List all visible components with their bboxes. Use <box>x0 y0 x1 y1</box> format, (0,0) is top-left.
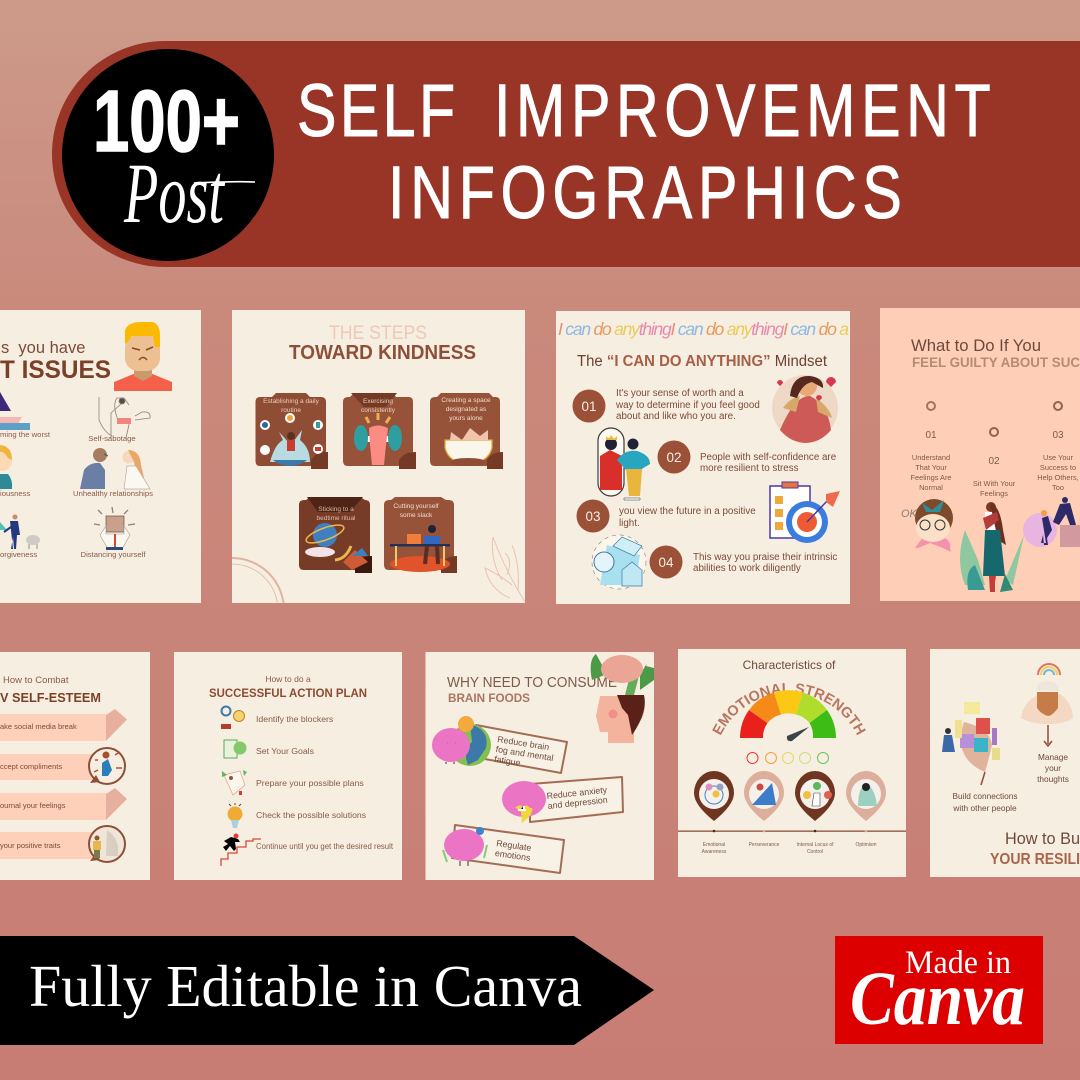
step 01: about and like who you are. <box>616 411 736 422</box>
title: INFOGRAPHICS <box>388 152 908 235</box>
card: regulate emotions <box>443 825 564 873</box>
pin: optimism <box>846 771 886 821</box>
icon: person with box on head <box>94 507 135 550</box>
step 03: light. <box>619 518 640 529</box>
icon: person at mirror <box>598 428 650 500</box>
text: build connections: Build connections <box>952 791 1018 801</box>
badge: 100+ Post <box>62 49 274 261</box>
decorative leaf <box>485 537 525 602</box>
row: positive traits: your positive traits <box>0 841 61 850</box>
title: SELF <box>297 70 458 153</box>
text: build connections: with other people <box>952 803 1017 813</box>
step 01 <box>910 402 952 492</box>
text: manage your thoughts: thoughts <box>1037 774 1069 784</box>
icon: frowning man <box>114 322 172 391</box>
label: ming the worst <box>0 430 51 439</box>
step 03: Help Others, <box>1037 473 1079 482</box>
badge: 100+ Post: Post <box>123 145 225 241</box>
step 03: Use Your <box>1043 453 1074 462</box>
heading: V SELF-ESTEEM <box>0 690 101 705</box>
step 01: Understand <box>912 453 950 462</box>
badge: made in Canva <box>835 936 1043 1044</box>
icon: woman among plants <box>960 502 1024 592</box>
icon: woman with hearts <box>772 375 838 443</box>
step 04: 04 <box>658 555 674 570</box>
icon: meditating man <box>1021 681 1073 746</box>
heading: The “I CAN DO ANYTHING” Mindset <box>577 353 828 370</box>
icon: girl with glasses <box>901 499 953 552</box>
heading <box>911 339 1080 367</box>
heading: THE STEPS <box>329 323 427 344</box>
item: possible solutions: Check the possible solutions <box>256 810 367 820</box>
step 03: Success to <box>1040 463 1076 472</box>
pin: emotional awareness <box>694 771 734 821</box>
timeline labels: Optimism <box>855 842 877 848</box>
step 01 <box>572 388 760 422</box>
heading: How to do a <box>265 674 311 684</box>
heading: How to Combat <box>3 675 69 686</box>
text: manage your thoughts: Manage <box>1038 752 1068 762</box>
panel: I can do anything mindset <box>556 311 850 604</box>
badge: 100+ Post: 100+ <box>93 73 240 170</box>
icon: helping hand <box>1023 497 1080 547</box>
card: regulate emotions: Regulate <box>496 838 532 853</box>
step 02: 02 <box>988 456 1000 467</box>
card: bedtime ritual: Sticking to a <box>318 506 354 513</box>
card: creating a space: designated as <box>446 406 487 413</box>
step 02: more resilient to stress <box>700 463 799 474</box>
panel: trust issues <box>0 310 201 603</box>
timeline <box>678 830 906 832</box>
banner: fully editable in Canva: Fully Editable in Canva <box>29 953 582 1019</box>
timeline labels: Internal Locus of <box>797 842 834 848</box>
item: continue stairs: Continue until you get the desired result <box>256 842 394 851</box>
row: journal your feelings: ournal your feelings <box>0 801 66 810</box>
card: reduce brain fog <box>432 716 567 773</box>
step 04: This way you praise their intrinsic <box>693 552 837 563</box>
heading <box>289 326 476 359</box>
card: cutting yourself some slack <box>384 497 457 573</box>
panel: toward kindness <box>232 310 525 603</box>
decorative hand-written strip: I can do anythingI can do anythingI can do a <box>558 319 849 339</box>
text: manage your thoughts: your <box>1045 763 1061 773</box>
item: identify the blockers: Identify the blockers <box>256 714 334 724</box>
icon: couple arguing <box>80 448 150 489</box>
heading: TOWARD KINDNESS <box>289 342 476 364</box>
title <box>297 70 996 235</box>
heading: How to Bu <box>1005 830 1080 848</box>
step 02: Feelings <box>980 489 1008 498</box>
icon: rainbow <box>1038 664 1060 675</box>
step 04: abilities to work diligently <box>693 563 801 574</box>
step 03: 03 <box>1052 430 1064 441</box>
label: orgiveness <box>0 550 37 559</box>
step 01: It's your sense of worth and a <box>616 388 744 399</box>
timeline labels: Control <box>807 849 823 855</box>
card: reduce brain fog: fog and mental <box>495 744 554 763</box>
icon: boat <box>0 392 30 430</box>
card: reduce brain fog: fatigue <box>494 754 521 768</box>
step 03: you view the future in a positive <box>619 506 756 517</box>
step 03 <box>576 500 756 532</box>
card: reduce anxiety: and depression <box>547 795 608 811</box>
icon: puzzle team <box>942 702 1000 785</box>
label: Unhealthy relationships <box>73 489 153 498</box>
pin: locus of control <box>795 771 835 821</box>
heading <box>0 341 110 378</box>
card: exercising <box>343 393 416 469</box>
heading <box>0 675 101 705</box>
step 01: way to determine if you feel good <box>615 400 760 411</box>
banner: fully editable in Canva <box>0 936 654 1045</box>
row: accept compliments <box>0 748 125 784</box>
step 03 <box>1037 402 1079 492</box>
item: prepare your plans: Prepare your possible plans <box>256 778 364 788</box>
label: Self-sabotage <box>88 434 136 443</box>
label: iousness <box>0 489 30 498</box>
card: exercising: consistently <box>361 407 396 414</box>
card: reduce anxiety: Reduce anxiety <box>546 785 608 801</box>
pin: perseverance <box>744 771 784 821</box>
title: IMPROVEMENT <box>494 70 996 153</box>
panel: feel guilty about success <box>880 308 1080 601</box>
item: set your goals <box>224 740 315 758</box>
icon: checklist and target <box>770 482 840 543</box>
card: creating a space: yours alone <box>449 415 483 422</box>
panel: emotional strength <box>678 649 906 877</box>
panel: successful action plan <box>174 652 402 880</box>
item: prepare your plans <box>222 770 364 795</box>
icon: jealous girl <box>0 445 12 489</box>
item: continue stairs <box>221 834 394 866</box>
step 01: That Your <box>915 463 947 472</box>
card: daily routine: Establishing a daily <box>263 398 320 405</box>
card: creating a space <box>430 393 503 469</box>
header banner <box>52 41 1080 267</box>
heading: s you have <box>1 339 85 357</box>
emoji row <box>747 752 828 764</box>
step 02 <box>658 440 837 474</box>
step 01: 01 <box>925 430 937 441</box>
card: daily routine <box>256 393 328 469</box>
card: regulate emotions: emotions <box>494 848 532 863</box>
card: daily routine: routine <box>281 407 301 414</box>
timeline labels: Perseverance <box>749 842 780 848</box>
item: possible solutions <box>228 803 367 828</box>
heading: T ISSUES <box>0 356 111 384</box>
badge: made in Canva: Made in <box>905 945 1011 981</box>
panel: brain foods <box>426 652 654 880</box>
step 04 <box>650 546 837 578</box>
label: Distancing yourself <box>81 550 146 559</box>
row: social media break <box>0 709 127 741</box>
heading: WHY NEED TO CONSUME <box>447 675 617 691</box>
item: set your goals: Set Your Goals <box>256 746 315 756</box>
icon: head with brain and leaves <box>591 654 654 743</box>
heading: Characteristics of <box>743 658 836 672</box>
card: creating a space: Creating a space <box>441 397 491 404</box>
step 02: People with self-confidence are <box>700 452 837 463</box>
timeline labels <box>702 842 877 855</box>
row: accept compliments: ccept compliments <box>0 762 62 771</box>
timeline labels: Emotional <box>703 842 725 848</box>
heading: What to Do If You <box>911 337 1041 355</box>
heading: BRAIN FOODS <box>448 691 530 705</box>
icon: handshake and sheep <box>0 514 40 549</box>
card: bedtime ritual <box>299 497 372 573</box>
step 02: 02 <box>666 450 682 465</box>
step 03: 03 <box>585 509 601 524</box>
heading <box>447 675 617 705</box>
card: reduce brain fog: Reduce brain <box>497 734 550 752</box>
card: reduce anxiety <box>502 777 623 823</box>
card: cutting yourself some slack: Cutting yourself <box>393 503 439 510</box>
gauge <box>740 690 836 741</box>
badge: made in Canva: Canva <box>850 957 1025 1041</box>
step 03: Too <box>1052 483 1064 492</box>
arched title: EMOTIONAL STRENGTH <box>712 683 866 736</box>
timeline labels: Awareness <box>702 849 727 855</box>
card: cutting yourself some slack: some slack <box>400 512 433 519</box>
step 01: Normal <box>919 483 943 492</box>
row: journal your feelings <box>0 788 127 820</box>
row: positive traits <box>0 826 125 862</box>
icon: girl with glasses: OK <box>901 508 918 520</box>
step 01: 01 <box>581 399 597 414</box>
panel: build your resilience <box>930 649 1080 877</box>
heading <box>209 674 367 700</box>
step 02 <box>973 428 1016 498</box>
card: exercising: Exercising <box>363 398 393 405</box>
step 01: Feelings Are <box>910 473 952 482</box>
icon: handshake and clock <box>592 535 646 589</box>
heading: SUCCESSFUL ACTION PLAN <box>209 688 367 700</box>
decorative ring <box>232 557 284 603</box>
card: bedtime ritual: bedtime ritual <box>316 515 356 522</box>
item: identify the blockers <box>221 706 334 729</box>
row: social media break: ake social media break <box>0 722 77 731</box>
icon: self-sabotage figure <box>99 397 150 438</box>
step 02: Sit With Your <box>973 479 1016 488</box>
panel: low self-esteem <box>0 652 150 880</box>
heading <box>990 830 1080 868</box>
